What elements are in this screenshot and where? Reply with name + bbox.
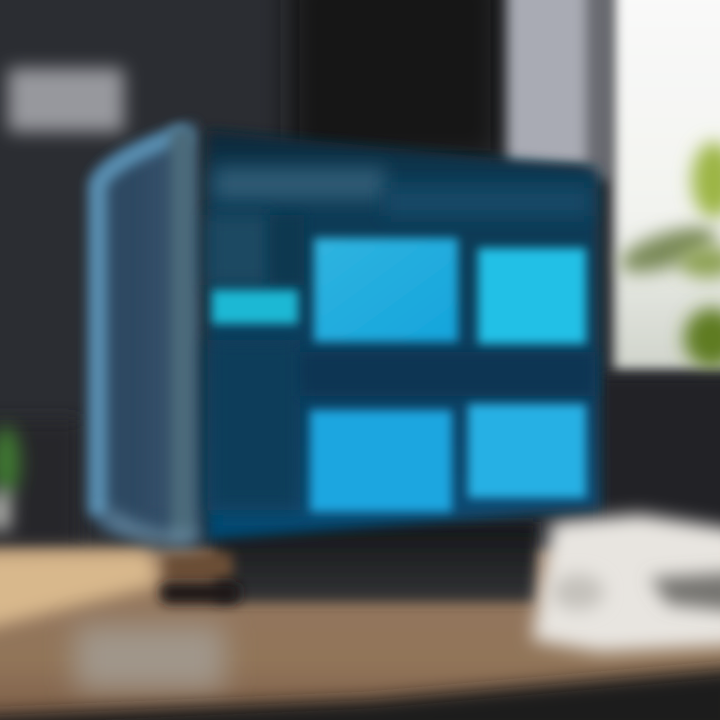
screen header band bbox=[385, 188, 590, 216]
plant leaves bbox=[615, 142, 720, 368]
tile: bottom right bbox=[468, 404, 586, 498]
light column bbox=[507, 0, 611, 180]
window bbox=[614, 0, 720, 370]
screen heading bar bbox=[215, 168, 385, 200]
tile: bottom left bbox=[310, 410, 452, 512]
sidebar upper bbox=[208, 215, 270, 285]
sidebar lower bbox=[208, 340, 300, 510]
desk bbox=[0, 550, 720, 720]
left small plant bbox=[0, 426, 20, 530]
sidebar highlight bbox=[212, 290, 298, 324]
tile: top right bbox=[478, 248, 586, 344]
monitor screen bbox=[207, 130, 600, 540]
paper on desk bbox=[532, 514, 720, 652]
left glass side panel bbox=[88, 122, 204, 541]
tile: top left bbox=[314, 238, 458, 342]
wall sign bbox=[8, 68, 124, 132]
monitor stand bbox=[160, 522, 537, 604]
sidebar dark edge bbox=[270, 215, 304, 285]
dark cabinet bbox=[600, 376, 720, 541]
dark divider band bbox=[300, 352, 595, 396]
